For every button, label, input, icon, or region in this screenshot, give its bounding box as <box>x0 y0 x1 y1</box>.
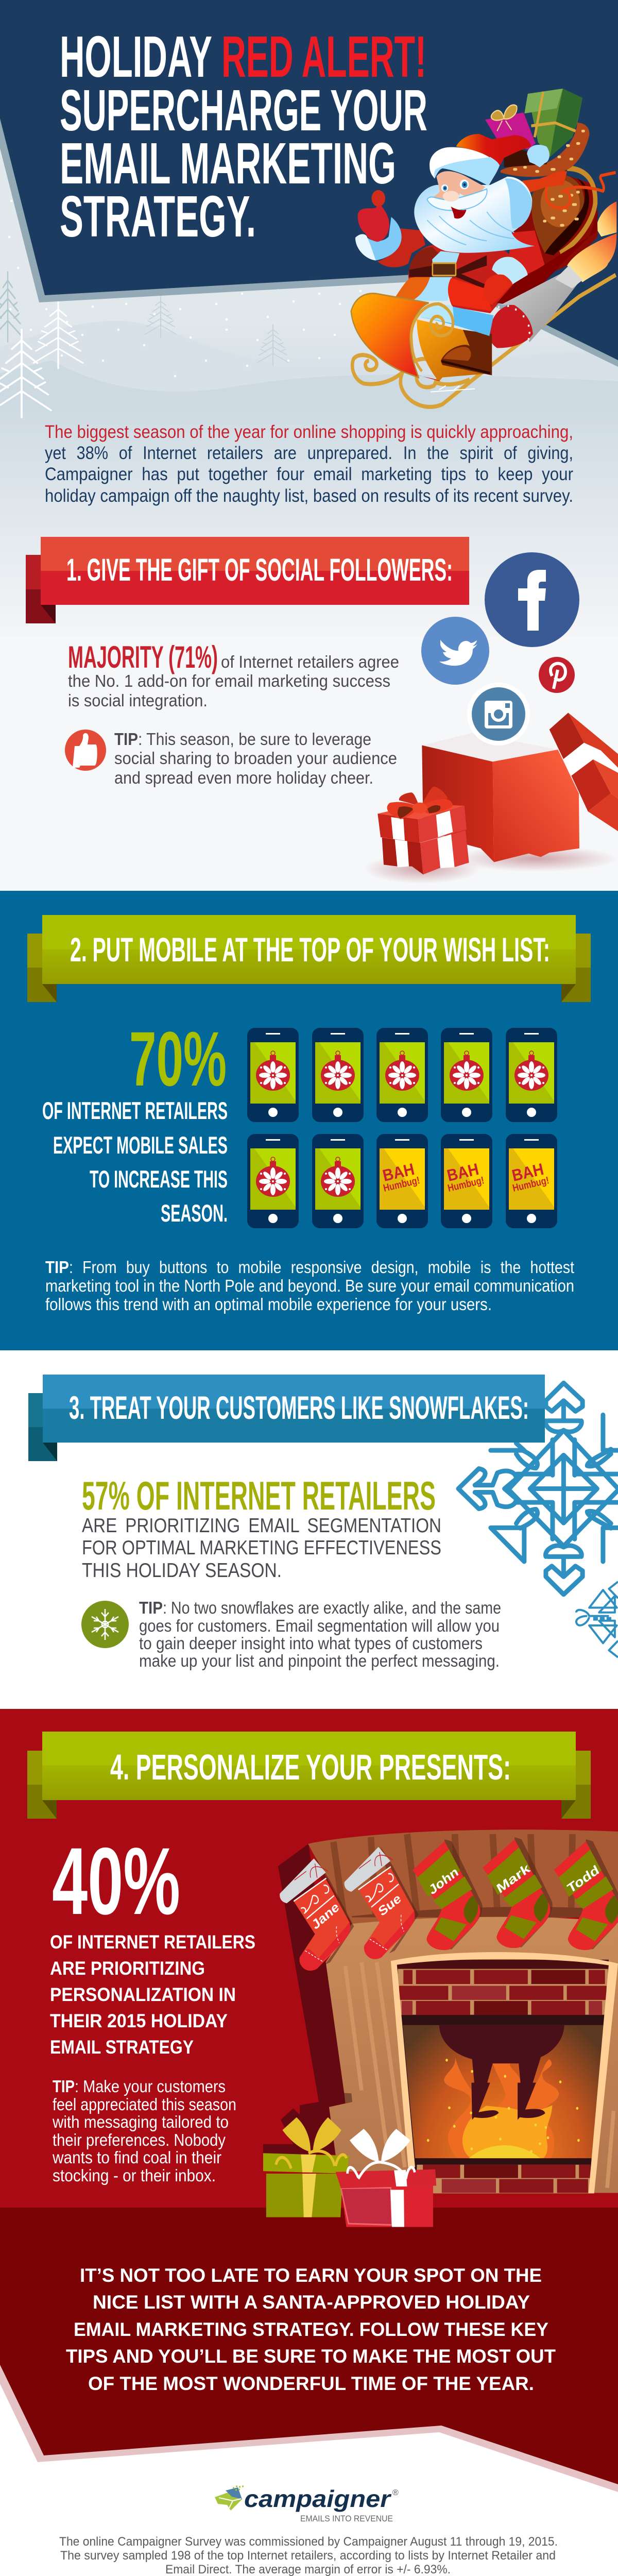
closing message: NICE LIST WITH A SANTA-APPROVED HOLIDAY <box>93 2292 530 2313</box>
stat: 70% of internet retailers: 70% <box>129 1015 227 1102</box>
phone: bah humbug <box>506 1134 557 1228</box>
stocking: Jane <box>280 1858 354 1971</box>
stat: 40% of internet retailers <box>50 1828 255 2058</box>
phone: bah humbug: Humbug! <box>511 1175 550 1194</box>
closing message <box>66 2265 556 2394</box>
firebox frame <box>391 1952 618 2193</box>
tip: section 1: social sharing to broaden your audience <box>114 749 397 768</box>
tip: section 1: : This season, be sure to leverage <box>138 730 371 749</box>
tip: section 2 <box>45 1258 574 1314</box>
title: STRATEGY. <box>60 184 256 249</box>
closing message: OF THE MOST WONDERFUL TIME OF THE YEAR. <box>88 2373 534 2394</box>
tip: section 4 <box>52 2077 236 2185</box>
rocket <box>489 266 582 348</box>
phone: bah humbug: BAH <box>381 1160 416 1185</box>
chart: phone pictogram <box>247 1028 557 1228</box>
logo: campaigner: EMAILS INTO REVENUE <box>300 2514 393 2523</box>
firebox interior <box>397 1960 610 2193</box>
tip: section 4: their preferences. Nobody <box>53 2130 226 2149</box>
title <box>60 24 427 249</box>
icon: small snowflake <box>576 1582 618 1657</box>
title: HOLIDAY <box>60 24 212 89</box>
illustration: santa on rocket sleigh <box>351 89 616 407</box>
tip: section 4: TIP <box>53 2077 75 2096</box>
stat: 40% of internet retailers: ARE PRIORITIZING <box>50 1958 205 1979</box>
phone: bah humbug <box>376 1134 428 1228</box>
icon: green snowflake badge <box>81 1601 129 1648</box>
stocking: Sue: Sue <box>376 1891 403 1920</box>
stocking: Mark <box>483 1837 553 1948</box>
phone: bah humbug <box>441 1134 492 1228</box>
stocking: Mark: Mark <box>494 1860 533 1896</box>
snow hills <box>0 320 618 412</box>
tip: section 4: stocking - or their inbox. <box>53 2166 216 2185</box>
intro paragraph: Campaigner has put together four email marketing tips to keep your <box>45 464 573 484</box>
stat: 57% of internet retailers: ARE PRIORITIZING EMAIL SEGMENTATION <box>82 1515 441 1537</box>
stat: 70% of internet retailers: TO INCREASE THIS <box>90 1165 228 1193</box>
tip: section 4: with messaging tailored to <box>52 2112 229 2131</box>
title: RED ALERT! <box>221 24 426 89</box>
logo: campaigner: campaigner <box>244 2485 391 2512</box>
santa beard and face <box>414 171 535 253</box>
icon: pink present <box>485 105 536 150</box>
tip: section 4: : Make your customers <box>75 2077 226 2096</box>
intro paragraph <box>45 422 573 506</box>
icon: instagram <box>467 683 530 745</box>
stocking: John <box>413 1839 483 1950</box>
present: green with yellow bow <box>263 2117 349 2217</box>
stat: 57% of internet retailers <box>82 1473 441 1582</box>
banner: section 3 heading <box>28 1375 545 1461</box>
stocking: Sue <box>345 1847 419 1959</box>
panel: snowy header and section one background <box>0 0 618 891</box>
tip: section 3: make up your list and pinpoint the perfect messaging. <box>139 1651 500 1670</box>
stat: 70% of internet retailers <box>42 1015 228 1227</box>
stat: 40% of internet retailers: PERSONALIZATION IN <box>50 1984 236 2005</box>
icon: twitter <box>421 617 489 685</box>
stat: majority 71%: MAJORITY (71%) <box>68 640 218 674</box>
banner: section 4 heading <box>27 1732 591 1819</box>
panel: section 2 blue background <box>0 891 618 1350</box>
gift lid <box>550 713 618 831</box>
panel: closing dark red block <box>0 2208 618 2492</box>
tip: section 4: wants to find coal in their <box>52 2148 221 2167</box>
logo: campaigner <box>215 2485 399 2523</box>
tip: section 3 <box>139 1598 501 1670</box>
tip: section 4: feel appreciated this season <box>53 2095 236 2114</box>
present: red with white bow <box>336 2129 436 2227</box>
tip: section 3: goes for customers. Email segmentation will allow you <box>139 1616 500 1635</box>
stat: 70% of internet retailers: OF INTERNET RETAILERS <box>42 1097 228 1124</box>
panel: navy title block <box>0 0 618 367</box>
icon: santa glove and cuff <box>355 190 402 261</box>
stat: 40% of internet retailers: OF INTERNET RETAILERS <box>50 1931 255 1953</box>
stat: 70% of internet retailers: EXPECT MOBILE SALES <box>53 1131 228 1159</box>
stat: majority 71%: of Internet retailers agree <box>221 652 399 671</box>
icon: facebook <box>485 552 579 647</box>
icon: campaigner envelope <box>215 2486 244 2511</box>
icon: snowy trees <box>0 272 288 417</box>
stat: 57% of internet retailers: FOR OPTIMAL MARKETING EFFECTIVENESS <box>82 1537 441 1559</box>
panel: section 4 red background <box>0 1709 618 2208</box>
stocking: Jane: Jane <box>310 1900 341 1933</box>
illustration: open gift box <box>364 713 618 884</box>
phone: bah humbug: BAH <box>445 1160 480 1185</box>
stat: majority 71%: the No. 1 add-on for email marketing success <box>68 671 390 690</box>
closing message: EMAIL MARKETING STRATEGY. FOLLOW THESE KEY <box>74 2319 548 2340</box>
stat: 57% of internet retailers: THIS HOLIDAY SEASON. <box>82 1560 282 1582</box>
stocking: Todd: Todd <box>565 1862 602 1896</box>
tip: section 3: : No two snowflakes are exactly alike, and the same <box>163 1598 501 1617</box>
stat: majority 71%: is social integration. <box>68 691 208 710</box>
footnote: The online Campaigner Survey was commissioned by Campaigner August 11 through 19, 2015. <box>59 2535 558 2549</box>
logo: campaigner: ® <box>392 2488 399 2497</box>
tip: section 3: to gain deeper insight into what types of customers <box>139 1634 483 1653</box>
icon: green present <box>524 89 582 157</box>
illustration: fireplace with stockings and presents <box>263 1829 618 2227</box>
stat: majority 71% <box>68 640 399 710</box>
stocking: Todd <box>554 1839 618 1950</box>
tip: section 1: and spread even more holiday cheer. <box>114 768 373 787</box>
closing message: IT’S NOT TOO LATE TO EARN YOUR SPOT ON THE <box>80 2265 542 2286</box>
closing message: TIPS AND YOU’LL BE SURE TO MAKE THE MOST OUT <box>66 2346 556 2367</box>
title: EMAIL MARKETING <box>60 131 396 196</box>
tip: section 2: follows this trend with an optimal mobile experience for your users. <box>45 1295 492 1314</box>
stat: 40% of internet retailers: THEIR 2015 HOLIDAY <box>50 2010 228 2031</box>
santa hat <box>430 134 550 186</box>
stat: 70% of internet retailers: SEASON. <box>161 1199 228 1227</box>
banner: section 2 heading <box>27 915 591 1002</box>
phone: bah humbug: Humbug! <box>382 1175 421 1194</box>
icon: thumbs up <box>65 730 106 771</box>
phone: bah humbug: Humbug! <box>447 1175 485 1194</box>
icon: large snowflake <box>458 1383 618 1595</box>
phone: bah humbug: BAH <box>510 1160 545 1185</box>
tip: section 3: TIP <box>139 1598 163 1617</box>
stat: 40% of internet retailers: 40% <box>52 1828 180 1935</box>
stocking: John: John <box>426 1865 461 1898</box>
banner: section 1 heading <box>26 537 469 623</box>
tip: section 1 <box>114 730 397 787</box>
icon: pinterest <box>539 657 575 693</box>
footnote <box>59 2535 558 2576</box>
sleigh body <box>351 293 494 382</box>
icon: small red present <box>377 787 469 874</box>
snow dots <box>6 155 360 376</box>
stat: 40% of internet retailers: EMAIL STRATEGY <box>50 2037 194 2058</box>
footnote: The survey sampled 198 of the top Internet retailers, according to lists by Internet Retailer and <box>60 2549 556 2563</box>
tip: section 2: TIP <box>45 1258 69 1277</box>
tip: section 1: TIP <box>114 730 138 749</box>
